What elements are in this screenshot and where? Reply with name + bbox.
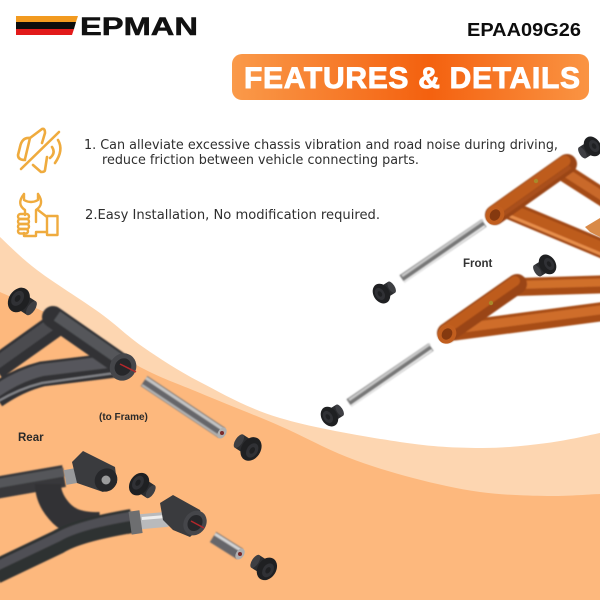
bushing: front upper right bbox=[574, 133, 600, 163]
icon: muted speaker bbox=[18, 129, 60, 172]
bushing: rear upper bottom bbox=[229, 429, 266, 465]
lower arm screw bbox=[489, 301, 493, 305]
rear lower rod end bbox=[160, 495, 211, 540]
upper arm screw bbox=[534, 179, 538, 183]
rear upper eye bbox=[104, 348, 142, 386]
background: light peach wave bbox=[0, 237, 600, 600]
logo flag stripes bbox=[16, 16, 78, 35]
product code: EPAA09G26 bbox=[467, 20, 581, 40]
diagram: rear long pin bbox=[142, 378, 229, 440]
diagram: front upper pin bbox=[402, 220, 485, 282]
rear lower tubes bbox=[0, 472, 132, 572]
label: Rear: Rear bbox=[18, 432, 44, 444]
bushing: front upper left bbox=[369, 277, 400, 307]
label: to Frame: (to Frame) bbox=[99, 412, 148, 423]
text: feature 2: 2.Easy Installation, No modification required. bbox=[85, 207, 380, 223]
diagram: rear short pin bbox=[213, 534, 247, 561]
upper arm plate bbox=[585, 218, 600, 237]
bushing: rear lower bottom bbox=[246, 549, 281, 584]
icon: hand with wrench bbox=[18, 194, 58, 236]
diagram: front lower pin bbox=[349, 344, 432, 406]
diagram: front lower orange arm bbox=[434, 281, 600, 347]
upper arm eye bbox=[482, 202, 508, 228]
diagram: rear lower gray arm bbox=[0, 451, 211, 572]
heading banner bbox=[232, 54, 589, 100]
text: feature 1: reduce friction between vehicle connecting parts. bbox=[102, 152, 419, 168]
logo bbox=[16, 13, 198, 41]
heading text: FEATURES & DETAILS bbox=[244, 62, 580, 95]
rear lower nut and sleeve bbox=[129, 510, 169, 535]
rear lower upper rod end bbox=[64, 451, 122, 496]
bushing: front lower right bbox=[529, 251, 560, 281]
text: feature 1 bbox=[84, 137, 558, 168]
rear upper tubes bbox=[0, 316, 122, 403]
bushing: front lower left bbox=[317, 400, 348, 430]
diagram: front upper orange arm bbox=[482, 161, 600, 260]
bushing: rear lower top bbox=[125, 469, 160, 504]
lower arm tubes bbox=[445, 281, 600, 333]
label: Front: Front bbox=[463, 258, 493, 270]
background: solid peach wave bbox=[0, 292, 600, 600]
diagram: rear upper gray arm bbox=[0, 316, 142, 403]
lower arm eye bbox=[434, 321, 460, 347]
upper arm tubes bbox=[493, 161, 600, 260]
bushing: rear upper top bbox=[3, 284, 42, 321]
logo wordmark: EPMAN bbox=[80, 13, 198, 41]
text: feature 1: 1. Can alleviate excessive chassis vibration and road noise during driving, bbox=[84, 137, 558, 153]
